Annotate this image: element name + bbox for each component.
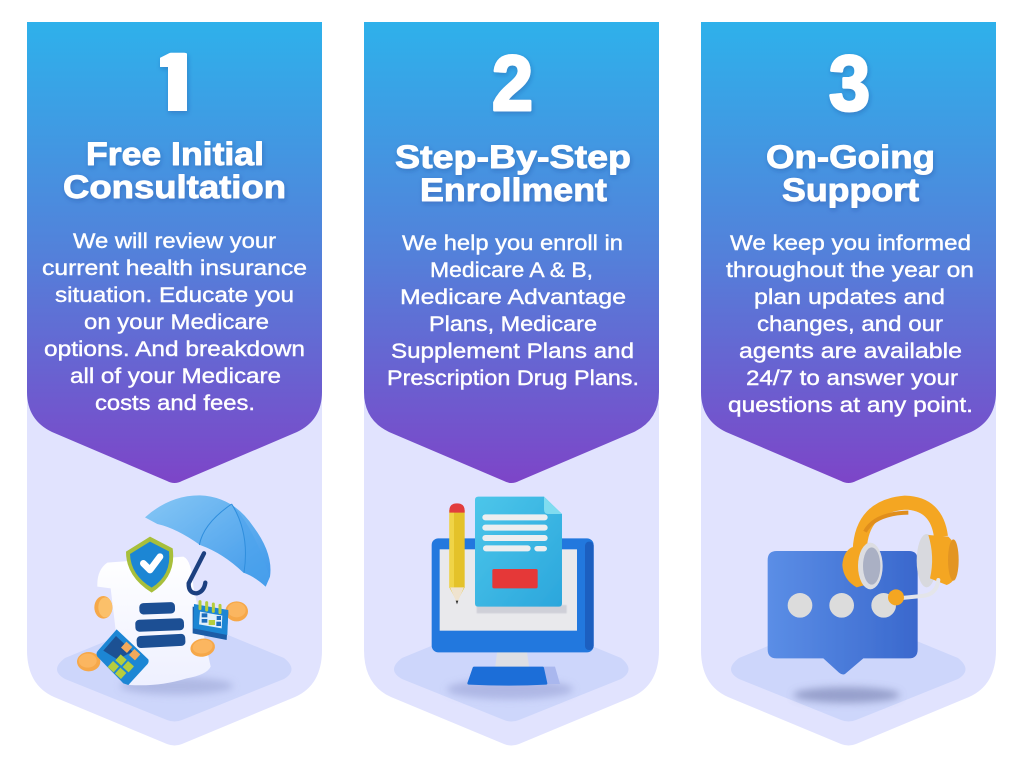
card 2 description: Medicare Advantage bbox=[400, 285, 626, 309]
panel: step 3 card bbox=[701, 22, 996, 746]
card 1 pale background bbox=[27, 22, 322, 746]
card 2 title: Enrollment bbox=[420, 172, 607, 208]
panel: step 2 card bbox=[364, 22, 659, 746]
card 3 title: On-Going bbox=[766, 139, 935, 175]
card 3 description: questions at any point. bbox=[728, 393, 973, 417]
card 1 description: on your Medicare bbox=[84, 310, 269, 334]
card 3 description: changes, and our bbox=[757, 312, 943, 336]
card 2 description bbox=[387, 231, 639, 390]
card 1 gradient banner bbox=[27, 22, 322, 483]
card 2 description: We help you enroll in bbox=[402, 231, 623, 255]
card 3 description: We keep you informed bbox=[730, 231, 971, 255]
card 2 platform bbox=[394, 613, 628, 722]
card 3 number: 3 bbox=[829, 39, 870, 127]
card 2 gradient banner bbox=[364, 22, 659, 483]
card 1 title: Consultation bbox=[63, 169, 286, 205]
card 3 platform bbox=[731, 613, 966, 722]
card 1 title bbox=[63, 136, 286, 205]
icon: insurance document with umbrella bbox=[77, 495, 270, 695]
card 1 number: 1 bbox=[148, 39, 202, 127]
card 3 pale background bbox=[701, 22, 996, 746]
card 1 title: Free Initial bbox=[86, 136, 264, 172]
card 3 description: plan updates and bbox=[754, 285, 945, 309]
card 3 title bbox=[766, 139, 935, 208]
card 2 description: Prescription Drug Plans. bbox=[387, 366, 639, 390]
card 3 description: throughout the year on bbox=[726, 258, 974, 282]
card 3 description bbox=[726, 231, 974, 417]
card 1 description: situation. Educate you bbox=[55, 283, 294, 307]
card 2 description: Supplement Plans and bbox=[391, 339, 634, 363]
panel: step 1 card bbox=[27, 22, 322, 746]
card 1 description bbox=[42, 229, 307, 415]
card 3 description: agents are available bbox=[739, 339, 962, 363]
card 1 description: current health insurance bbox=[42, 256, 307, 280]
card 3 title: Support bbox=[782, 172, 919, 208]
card 1 description: all of your Medicare bbox=[70, 364, 281, 388]
card 1 description: We will review your bbox=[73, 229, 276, 253]
card 1 description: costs and fees. bbox=[95, 391, 255, 415]
icon: chat bubble with headset bbox=[768, 503, 959, 703]
card 2 description: Medicare A & B, bbox=[430, 258, 593, 282]
card 3 description: 24/7 to answer your bbox=[746, 366, 958, 390]
card 1 platform bbox=[57, 613, 292, 722]
card 3 gradient banner bbox=[701, 22, 996, 483]
card 2 title bbox=[395, 139, 631, 208]
card 1 description: options. And breakdown bbox=[44, 337, 305, 361]
card 2 title: Step-By-Step bbox=[395, 139, 631, 175]
icon: computer monitor with form and pencil bbox=[432, 497, 594, 699]
card 2 description: Plans, Medicare bbox=[429, 312, 597, 336]
card 2 pale background bbox=[364, 22, 659, 746]
card 2 number: 2 bbox=[492, 39, 533, 127]
